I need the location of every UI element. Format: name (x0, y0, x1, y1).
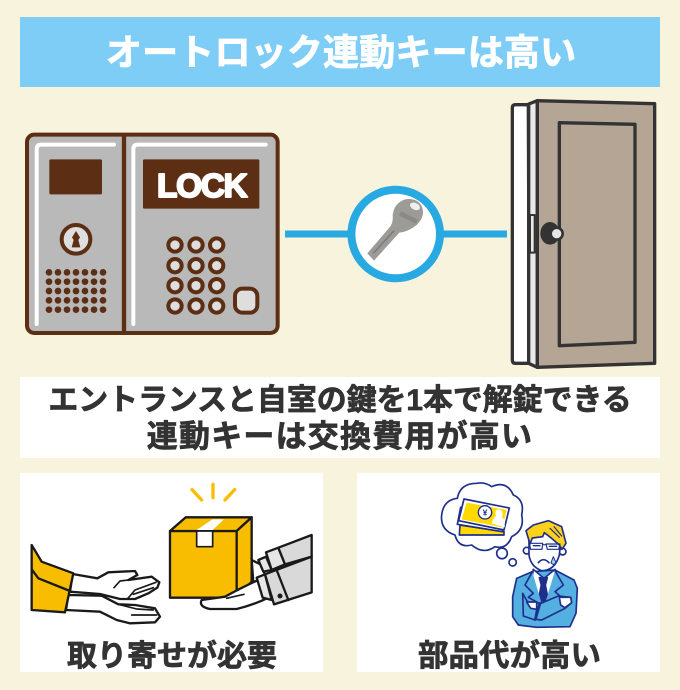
caption: 取り寄せが必要 (67, 639, 277, 673)
head (523, 547, 530, 554)
illustration: thought bubble with banknotes (441, 483, 522, 566)
title banner (20, 17, 660, 87)
illustration: worried businessman (513, 521, 577, 627)
icon: key in circle (351, 190, 440, 278)
face (529, 543, 560, 549)
icon: door (512, 101, 655, 367)
keypad (168, 238, 257, 313)
connector line (285, 230, 507, 238)
left sleeve (32, 545, 73, 612)
panel: parts are expensive (357, 473, 660, 673)
suit body (513, 570, 577, 627)
text block: description (20, 377, 660, 458)
illustration: thought bubble with banknotes: ¥ (483, 507, 488, 517)
ray lines (192, 484, 235, 500)
upper left hand (70, 571, 159, 599)
text block: description: 連動キーは交換費用が高い (147, 419, 533, 454)
lower left hand (66, 595, 160, 623)
LOCK label: LOCK (157, 168, 248, 205)
box (170, 531, 237, 598)
text block: description: エントランスと自室の鍵を1本で解錠できる (48, 384, 632, 417)
door knob (540, 222, 563, 245)
keyhole (62, 225, 90, 254)
crossed arms (523, 593, 537, 620)
hair (526, 521, 566, 549)
icon: entrance auto-lock panel (27, 135, 278, 333)
right hand (252, 560, 267, 582)
caption: 部品代が高い (418, 638, 601, 673)
title banner: オートロック連動キーは高い (106, 32, 576, 73)
right sleeves (258, 557, 272, 572)
panel: ordering required (20, 473, 323, 673)
speaker dots (49, 272, 103, 310)
illustration: handing over a box (32, 484, 312, 623)
